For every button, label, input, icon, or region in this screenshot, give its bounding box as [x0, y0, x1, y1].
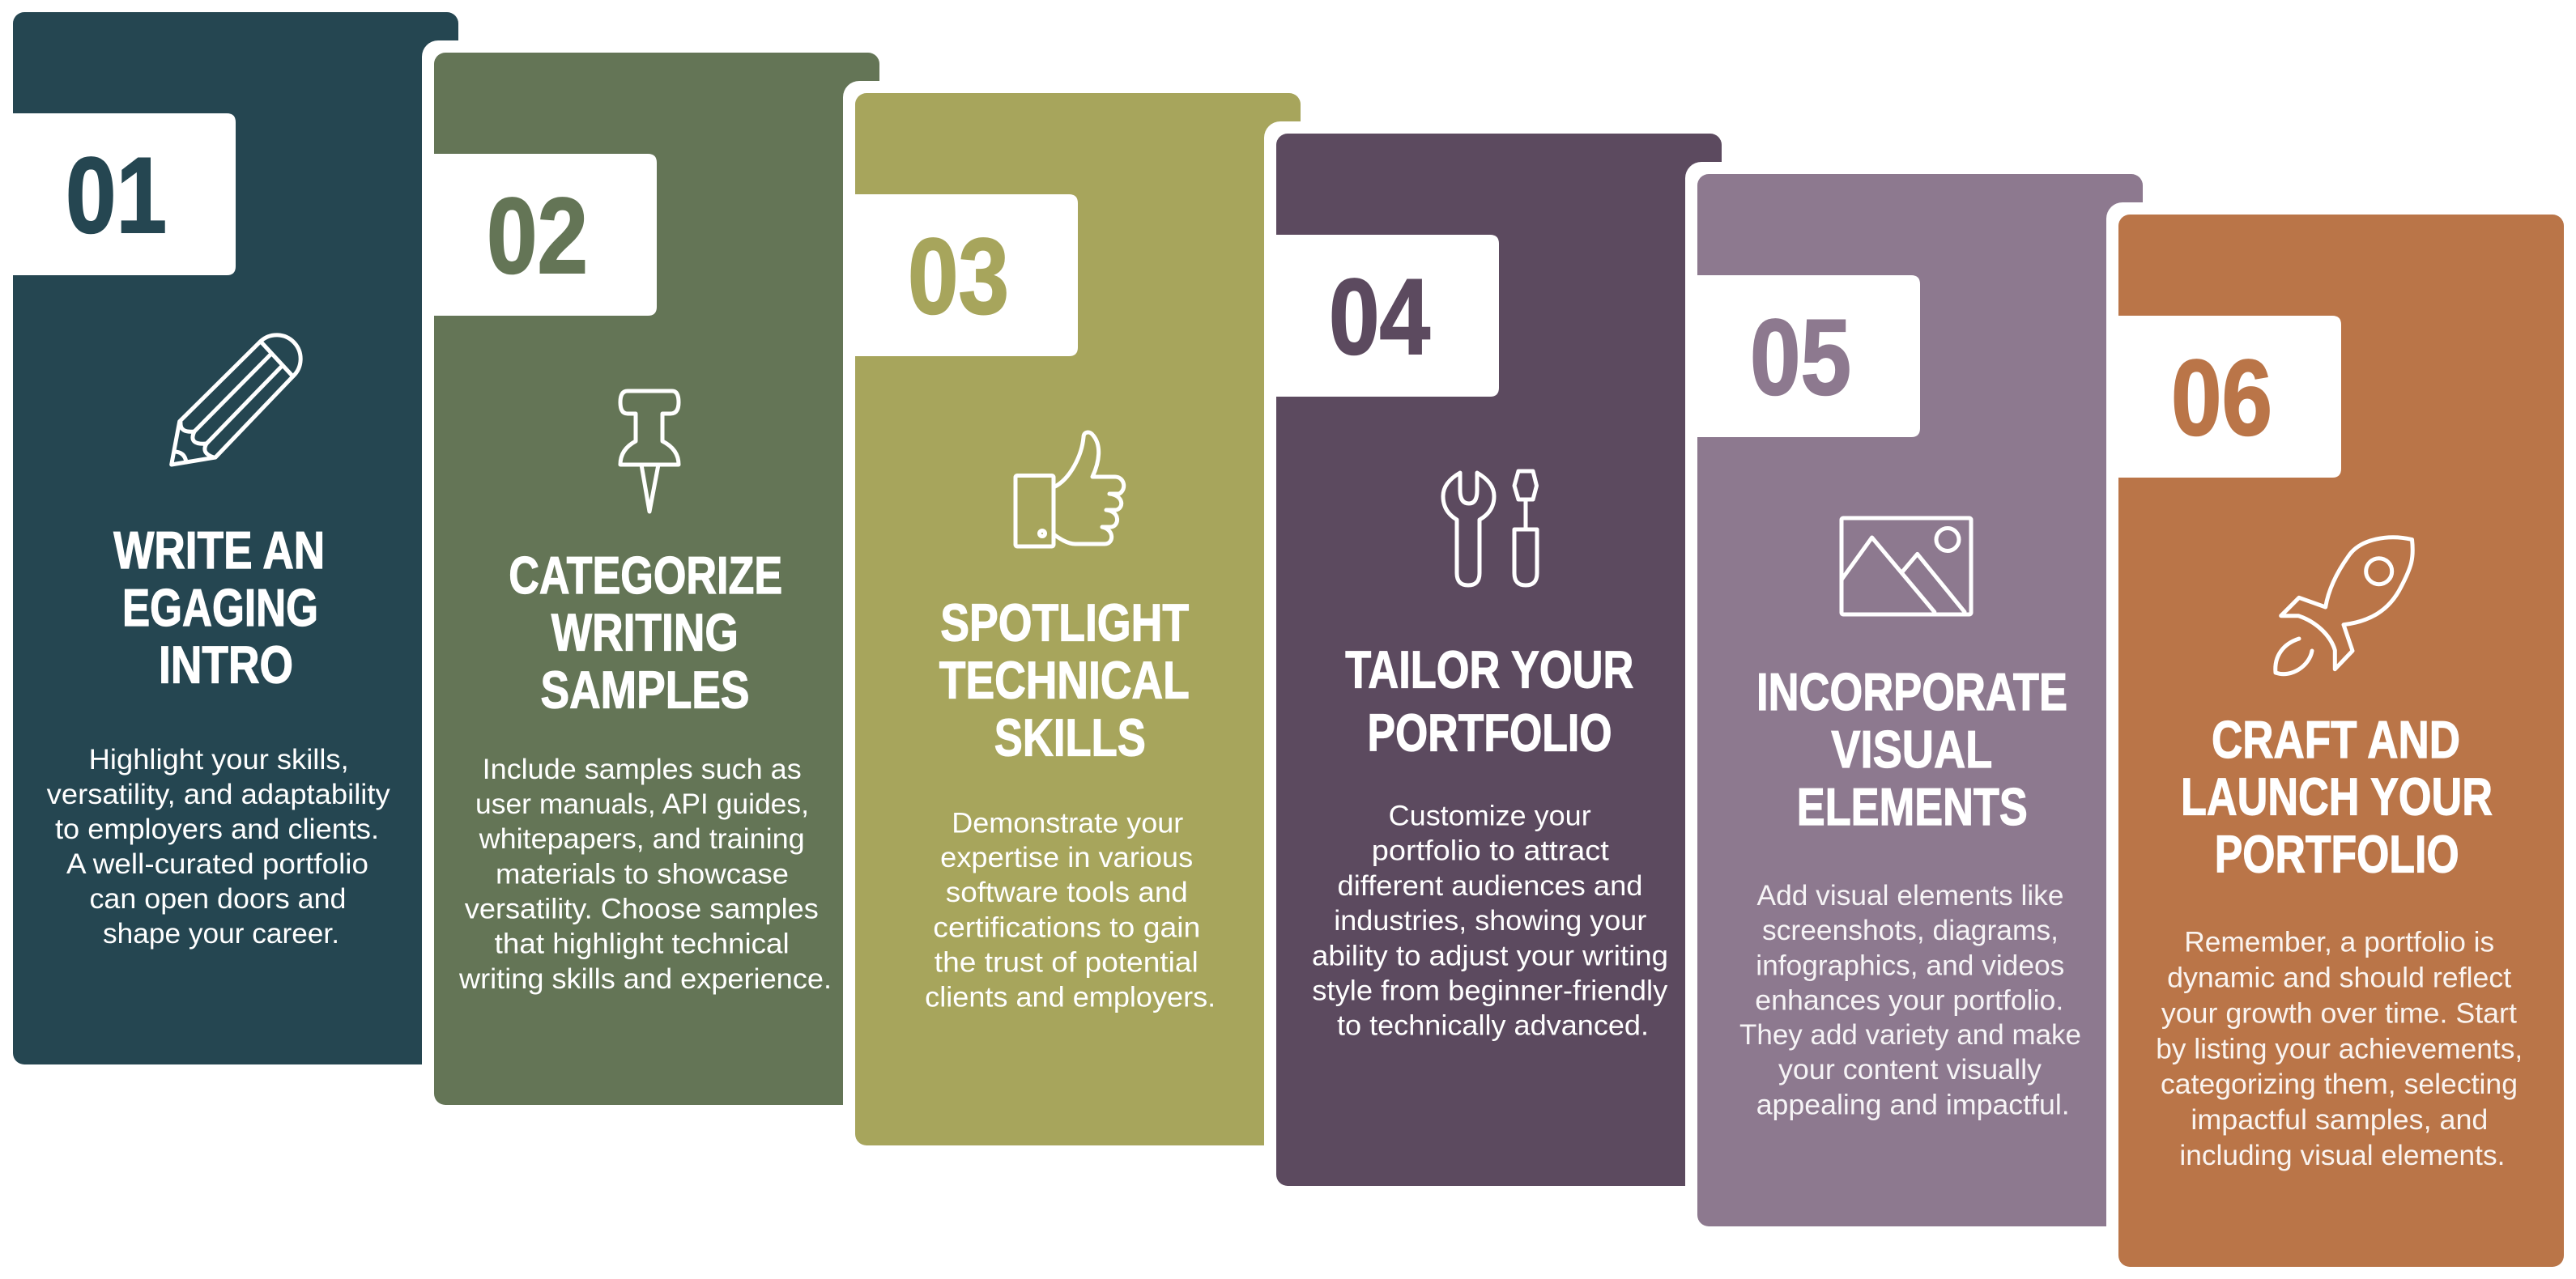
- panel: step 6 craft and launch your portfolio: [2118, 215, 2564, 1267]
- body text: step 2: versatility. Choose samples: [465, 892, 819, 924]
- title: write an egaging intro: [113, 521, 325, 695]
- body text: step 6: impactful samples, and: [2191, 1103, 2488, 1136]
- body text: step 3: certifications to gain: [933, 911, 1200, 943]
- body text: step 6: [2156, 926, 2523, 1171]
- title: categorize writing samples: CATEGORIZE: [509, 546, 782, 605]
- body text: step 6: dynamic and should reflect: [2167, 961, 2511, 993]
- body text: step 6: your growth over time. Start: [2161, 996, 2517, 1029]
- title: write an egaging intro: INTRO: [159, 635, 293, 695]
- body text: step 5: appealing and impactful.: [1756, 1088, 2070, 1120]
- body text: step 5: [1739, 879, 2081, 1120]
- body text: step 4: portfolio to attract: [1372, 834, 1609, 866]
- body text: step 1: A well-curated portfolio: [66, 848, 368, 880]
- body text: step 2: whitepapers, and training: [479, 822, 805, 855]
- title: categorize writing samples: [509, 546, 782, 720]
- body text: step 5: They add variety and make: [1739, 1018, 2081, 1051]
- panel: step 3 spotlight technical skills: [855, 93, 1301, 1145]
- title: craft and launch your portfolio: LAUNCH YOUR: [2181, 767, 2493, 826]
- body text: step 2: writing skills and experience.: [458, 962, 832, 995]
- body text: step 2: materials to showcase: [496, 857, 789, 890]
- body text: step 5: your content visually: [1778, 1053, 2042, 1086]
- title: craft and launch your portfolio: PORTFOLIO: [2215, 825, 2459, 884]
- body text: step 6: including visual elements.: [2179, 1139, 2505, 1171]
- body text: step 4: different audiences and: [1338, 869, 1642, 902]
- icon: thumbs up: [1015, 432, 1124, 546]
- title: tailor your portfolio: PORTFOLIO: [1367, 703, 1612, 763]
- body text: step 3: expertise in various: [940, 841, 1193, 873]
- card 2 background: [434, 53, 879, 1105]
- title: tailor your portfolio: TAILOR YOUR: [1345, 640, 1633, 699]
- title: categorize writing samples: WRITING: [551, 603, 739, 662]
- number badge 05: 05: [1750, 298, 1851, 418]
- body text: step 5: infographics, and videos: [1756, 949, 2064, 981]
- body text: step 4: ability to adjust your writing: [1312, 939, 1668, 971]
- card 6 background: [2118, 215, 2564, 1267]
- title: incorporate visual elements: [1756, 662, 2067, 836]
- card 5 background: [1697, 174, 2143, 1226]
- number badge 02: 02: [487, 176, 588, 296]
- title: spotlight technical skills: TECHNICAL: [939, 650, 1190, 709]
- body text: step 6: by listing your achievements,: [2156, 1032, 2523, 1064]
- body text: step 3: the trust of potential: [935, 946, 1199, 979]
- body text: step 1: [47, 743, 390, 950]
- body text: step 1: Highlight your skills,: [89, 743, 349, 775]
- body text: step 6: Remember, a portfolio is: [2184, 926, 2494, 958]
- title: spotlight technical skills: [939, 593, 1190, 767]
- body text: step 5: screenshots, diagrams,: [1762, 914, 2059, 946]
- number badge 04: 04: [1329, 257, 1430, 377]
- title: write an egaging intro: EGAGING: [122, 578, 318, 637]
- icon: wrench and screwdriver: [1443, 471, 1537, 585]
- body text: step 1: to employers and clients.: [55, 813, 379, 845]
- panel: step 2 categorize writing samples: [434, 53, 879, 1105]
- title: write an egaging intro: WRITE AN: [113, 521, 325, 580]
- body text: step 1: can open doors and: [89, 882, 347, 915]
- body text: step 2: user manuals, API guides,: [475, 788, 809, 820]
- body text: step 5: Add visual elements like: [1757, 879, 2063, 911]
- card 4 background: [1276, 134, 1722, 1186]
- card 3 background: [855, 93, 1301, 1145]
- body text: step 3: software tools and: [946, 876, 1188, 908]
- number badge 06: 06: [2171, 338, 2272, 458]
- number badge 05: [1697, 275, 1920, 437]
- title: incorporate visual elements: ELEMENTS: [1797, 777, 2028, 836]
- title: tailor your portfolio: [1345, 640, 1633, 763]
- body text: step 5: enhances your portfolio.: [1755, 984, 2063, 1016]
- icon: pencil: [172, 335, 300, 465]
- title: spotlight technical skills: SPOTLIGHT: [940, 593, 1189, 652]
- body text: step 3: clients and employers.: [925, 980, 1216, 1013]
- body text: step 3: Demonstrate your: [952, 806, 1183, 839]
- number badge 02: [434, 154, 657, 316]
- number badge 01: [13, 113, 236, 275]
- body text: step 4: style from beginner-friendly: [1312, 975, 1668, 1007]
- body text: step 6: categorizing them, selecting: [2161, 1068, 2518, 1100]
- body text: step 4: Customize your: [1389, 799, 1591, 831]
- body text: step 2: [458, 753, 832, 995]
- title: craft and launch your portfolio: CRAFT AND: [2212, 710, 2460, 769]
- body text: step 4: to technically advanced.: [1337, 1009, 1649, 1041]
- number badge 06: [2118, 316, 2341, 478]
- panel: step 5 incorporate visual elements: [1697, 174, 2143, 1226]
- icon: push pin: [620, 391, 679, 512]
- body text: step 2: Include samples such as: [483, 753, 802, 785]
- title: incorporate visual elements: INCORPORATE: [1756, 662, 2067, 721]
- title: spotlight technical skills: SKILLS: [994, 707, 1146, 767]
- body text: step 2: that highlight technical: [495, 928, 790, 960]
- panel: step 4 tailor your portfolio: [1276, 134, 1722, 1186]
- panel: step 1 write an engaging intro: [13, 12, 458, 1064]
- body text: step 4: [1312, 799, 1668, 1041]
- icon: rocket: [2276, 538, 2412, 674]
- title: craft and launch your portfolio: [2181, 710, 2493, 884]
- body text: step 1: shape your career.: [103, 917, 339, 950]
- number badge 04: [1276, 235, 1499, 397]
- card 1 background: [13, 12, 458, 1064]
- number badge 01: 01: [66, 136, 167, 256]
- title: incorporate visual elements: VISUAL: [1831, 720, 1992, 779]
- number badge 03: 03: [908, 217, 1009, 337]
- body text: step 4: industries, showing your: [1334, 904, 1646, 937]
- body text: step 3: [925, 806, 1216, 1013]
- body text: step 1: versatility, and adaptability: [47, 778, 390, 810]
- title: categorize writing samples: SAMPLES: [541, 661, 750, 720]
- number badge 03: [855, 194, 1078, 356]
- icon: picture with mountains: [1842, 518, 1971, 614]
